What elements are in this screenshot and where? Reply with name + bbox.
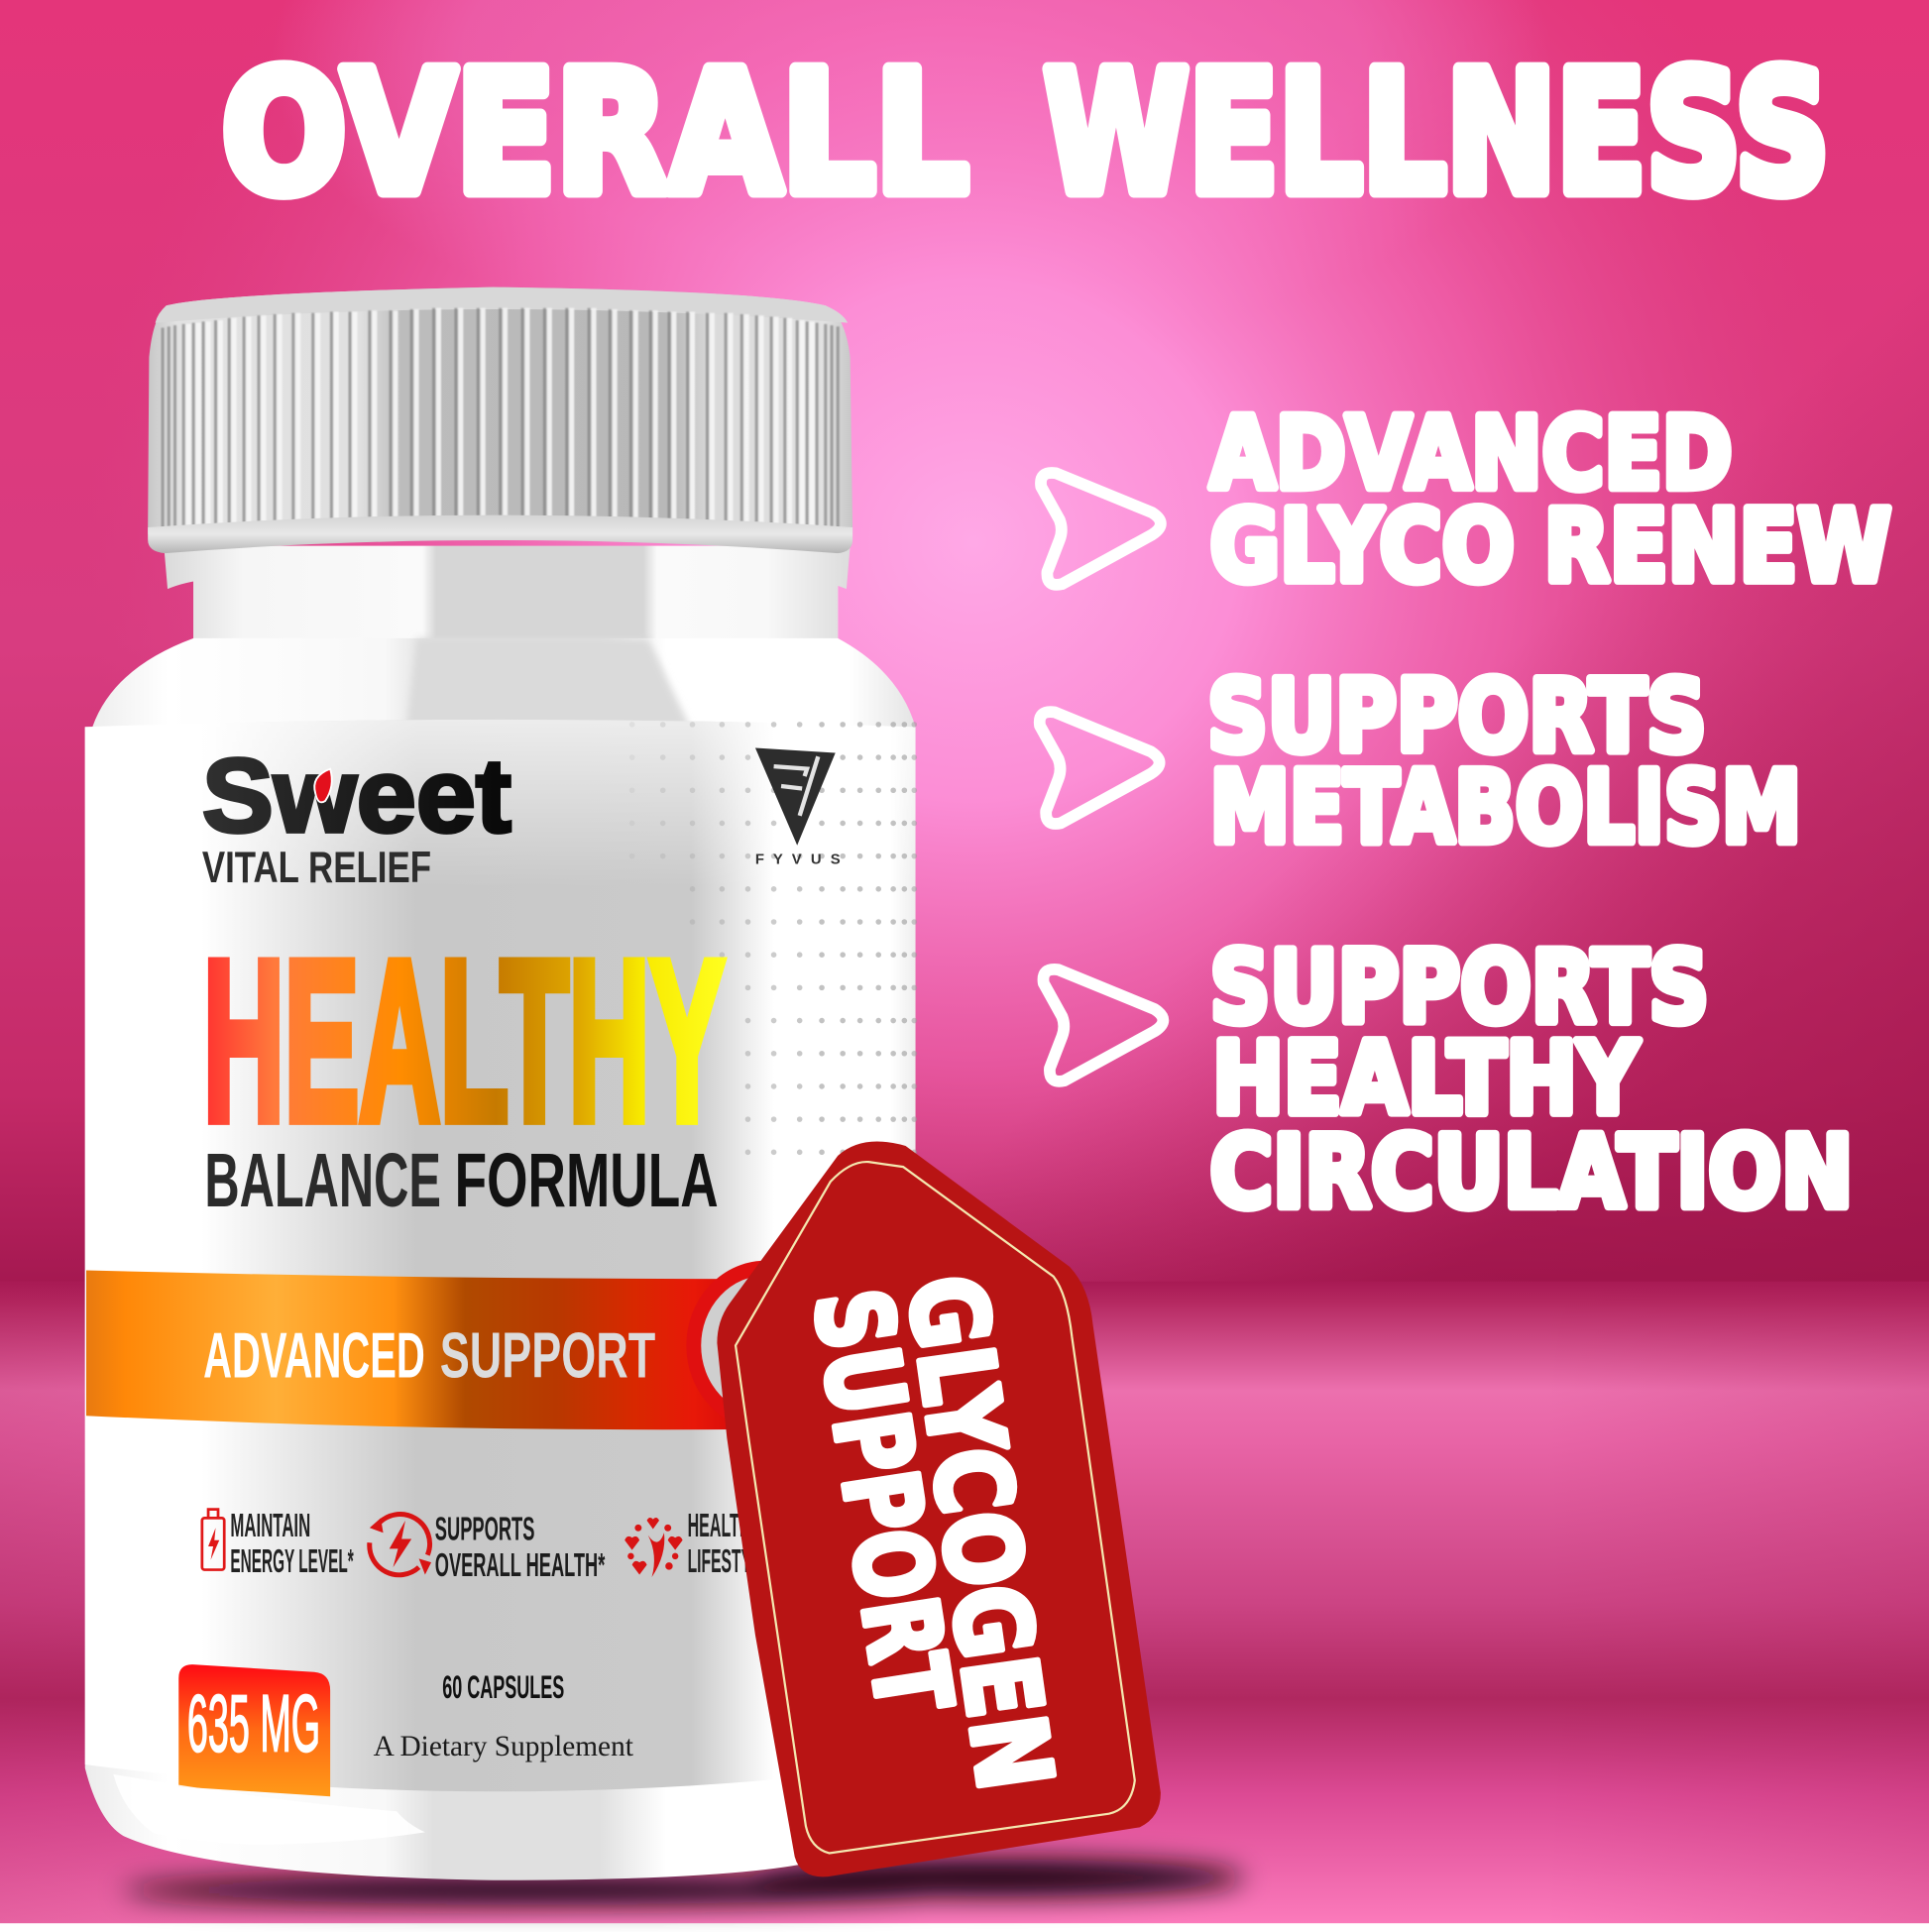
benefit: supports healthy circulation [1043, 931, 1853, 1230]
text: supports metabolism: SUPPORTS [1207, 660, 1707, 774]
bottle body [85, 579, 916, 1880]
brand: sweet vital relief: Sweet [202, 738, 511, 854]
text: supports healthy circulation [1210, 931, 1853, 1230]
cap rim [148, 515, 852, 553]
title [222, 36, 1830, 231]
logo: fyvus [755, 747, 841, 867]
neck highlight [193, 574, 838, 638]
icon: cycle bolt [370, 1515, 431, 1575]
benefit: advanced glyco renew [1041, 398, 1891, 604]
dosage badge: 635 mg [178, 1664, 330, 1796]
label dot pattern [632, 725, 914, 1153]
tag text: SUPPORT [790, 1282, 974, 1720]
text: supports metabolism: METABOLISM [1210, 751, 1801, 865]
background floor [0, 1282, 1929, 1932]
product subtitle: balance formula: FORMULA [455, 1138, 719, 1223]
tag: glycogen support [717, 1142, 1161, 1876]
text: supports healthy circulation: CIRCULATION [1210, 1116, 1853, 1230]
brand: sweet vital relief: VITAL RELIEF [202, 843, 431, 892]
benefit: supports overall health [370, 1512, 606, 1584]
orange band [86, 1268, 839, 1429]
icon: arrow 1 [1041, 473, 1161, 585]
label top fade [85, 720, 916, 887]
tag shape [717, 1142, 1161, 1876]
icon: hearts figure [624, 1518, 683, 1577]
text: advanced glyco renew: ADVANCED [1210, 398, 1733, 511]
product label: ENERGY LEVEL* [230, 1543, 354, 1580]
icon: arrow 2 [1040, 712, 1160, 824]
text: supports healthy circulation: HEALTHY [1212, 1022, 1640, 1136]
band text: SUPPORT [440, 1319, 655, 1392]
product label: LIFESTYLE [688, 1543, 771, 1580]
benefit: supports overall health: SUPPORTS [435, 1512, 534, 1548]
bottle base highlight [113, 1774, 425, 1845]
supplement note: A Dietary Supplement [374, 1730, 634, 1762]
tag inner line [736, 1162, 1135, 1853]
ground shadow [123, 1860, 1244, 1905]
benefit: healthy lifestyle: HEALTHY [688, 1508, 761, 1544]
benefit: supports overall health: OVERALL HEALTH* [435, 1547, 606, 1584]
product label: HEALTHY [203, 913, 725, 1168]
product label [85, 720, 916, 1796]
icon: arrow 3 [1043, 969, 1163, 1081]
cap shell [148, 287, 852, 552]
benefit: supports metabolism [1040, 660, 1801, 865]
logo: fyvus: F Y V U S [755, 852, 841, 867]
capsule count: 60 CAPSULES [442, 1669, 564, 1705]
text: supports healthy circulation: SUPPORTS [1210, 931, 1709, 1045]
product subtitle: balance formula: BALANCE [204, 1138, 441, 1223]
glass ring [164, 546, 851, 589]
label sheet [85, 720, 916, 1791]
text: advanced glyco renew [1210, 398, 1891, 604]
benefit: maintain energy level: MAINTAIN [230, 1508, 310, 1544]
shoulder center shade [406, 638, 690, 727]
tag text [790, 1268, 1076, 1797]
background wall [0, 0, 1929, 1288]
cap ribs [163, 308, 838, 532]
text: supports metabolism [1207, 660, 1801, 865]
product label: 635 MG [187, 1678, 320, 1768]
benefit: maintain energy level [202, 1508, 354, 1580]
icon: red drop [314, 769, 332, 802]
cap rib highlights [188, 308, 812, 532]
band text: ADVANCED [203, 1319, 425, 1392]
supplement bottle [85, 287, 916, 1880]
bottle cap [148, 287, 852, 553]
icon: battery [202, 1510, 224, 1570]
benefit: healthy lifestyle [624, 1508, 771, 1580]
tag text: GLYCOGEN [883, 1268, 1076, 1797]
title: OVERALL [222, 36, 968, 231]
cap top bevel [156, 287, 848, 323]
band ring [694, 1268, 839, 1423]
